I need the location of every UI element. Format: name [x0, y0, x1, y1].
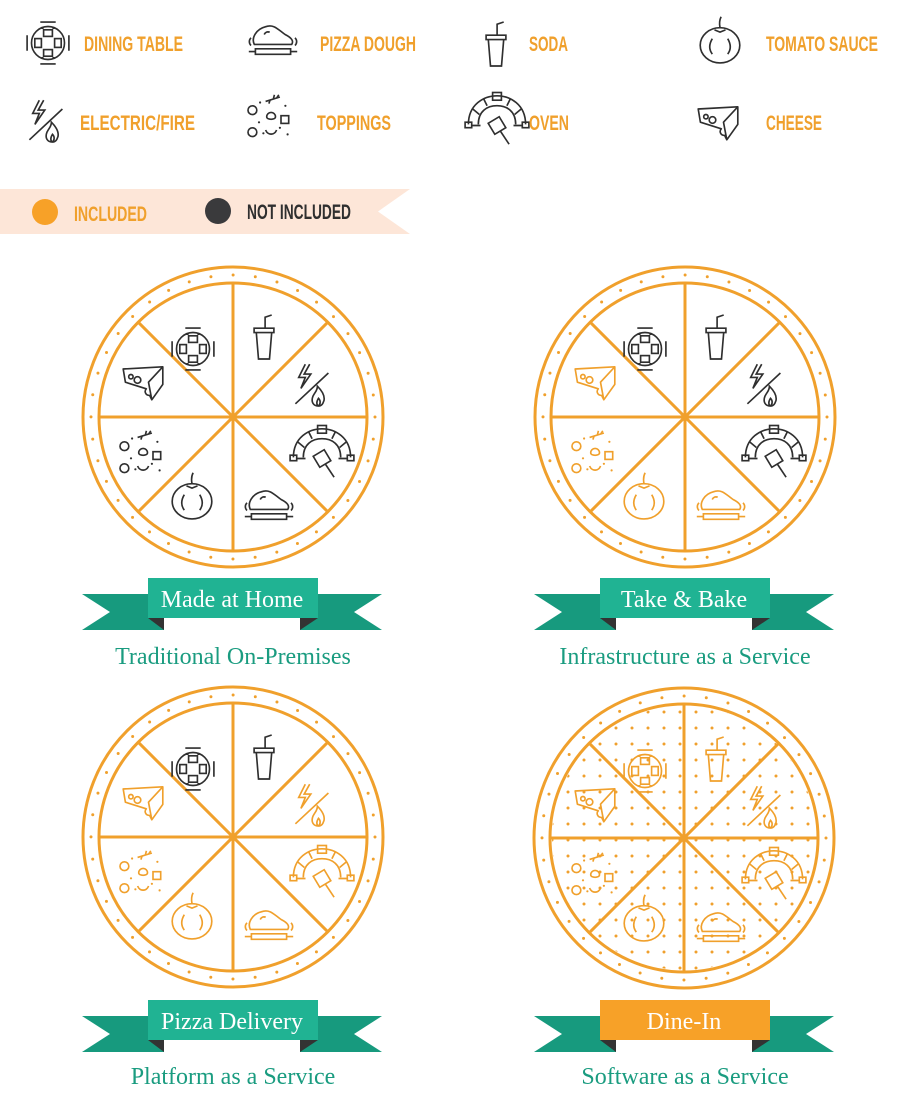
banner: Made at Home — [82, 578, 382, 630]
icon: cheese: CHEESE — [766, 112, 822, 135]
pizza 3: Pizza Delivery — [83, 687, 383, 987]
banner: Take & Bake — [534, 578, 834, 630]
icon: oven — [465, 92, 569, 144]
subtitle: Platform as a Service: Platform as a Service — [131, 1064, 335, 1090]
banner: Pizza Delivery — [82, 1000, 382, 1052]
icon: pizza dough — [249, 26, 416, 56]
icon: dining table — [27, 22, 183, 64]
banner: Pizza Delivery: Pizza Delivery — [161, 1009, 303, 1035]
icon: dining table: DINING TABLE — [84, 33, 183, 56]
pizza 2: Take & Bake — [535, 267, 835, 567]
icon: electric/fire: ELECTRIC/FIRE — [80, 112, 195, 135]
banner: Take & Bake: Take & Bake — [621, 587, 747, 613]
legend: icons — [27, 17, 878, 144]
pizza 1: Made at Home — [83, 267, 383, 567]
icon: cheese — [698, 107, 822, 140]
banner: Dine-In: Dine-In — [647, 1009, 721, 1035]
banner: Dine-In — [534, 1000, 834, 1052]
icon: toppings — [248, 95, 391, 137]
icon: oven: OVEN — [529, 112, 569, 135]
legend band: included / not included — [0, 189, 410, 234]
subtitle: Software as a Service: Software as a Service — [581, 1064, 789, 1090]
subtitle: Traditional On-Premises: Traditional On-Premises — [115, 644, 351, 670]
pizza 4: Dine-In — [534, 688, 834, 988]
subtitle: Infrastructure as a Service: Infrastructure as a Service — [559, 644, 811, 670]
icon: toppings: TOPPINGS — [317, 112, 391, 135]
icon: tomato sauce — [700, 17, 878, 63]
legend band: included / not included: INCLUDED — [74, 203, 147, 226]
icon: electric/fire — [29, 100, 195, 142]
legend band: included / not included: NOT INCLUDED — [247, 201, 351, 224]
banner: Made at Home: Made at Home — [161, 587, 303, 613]
icon: pizza dough: PIZZA DOUGH — [320, 33, 416, 56]
icon: soda: SODA — [529, 33, 568, 56]
icon: soda — [486, 22, 568, 66]
